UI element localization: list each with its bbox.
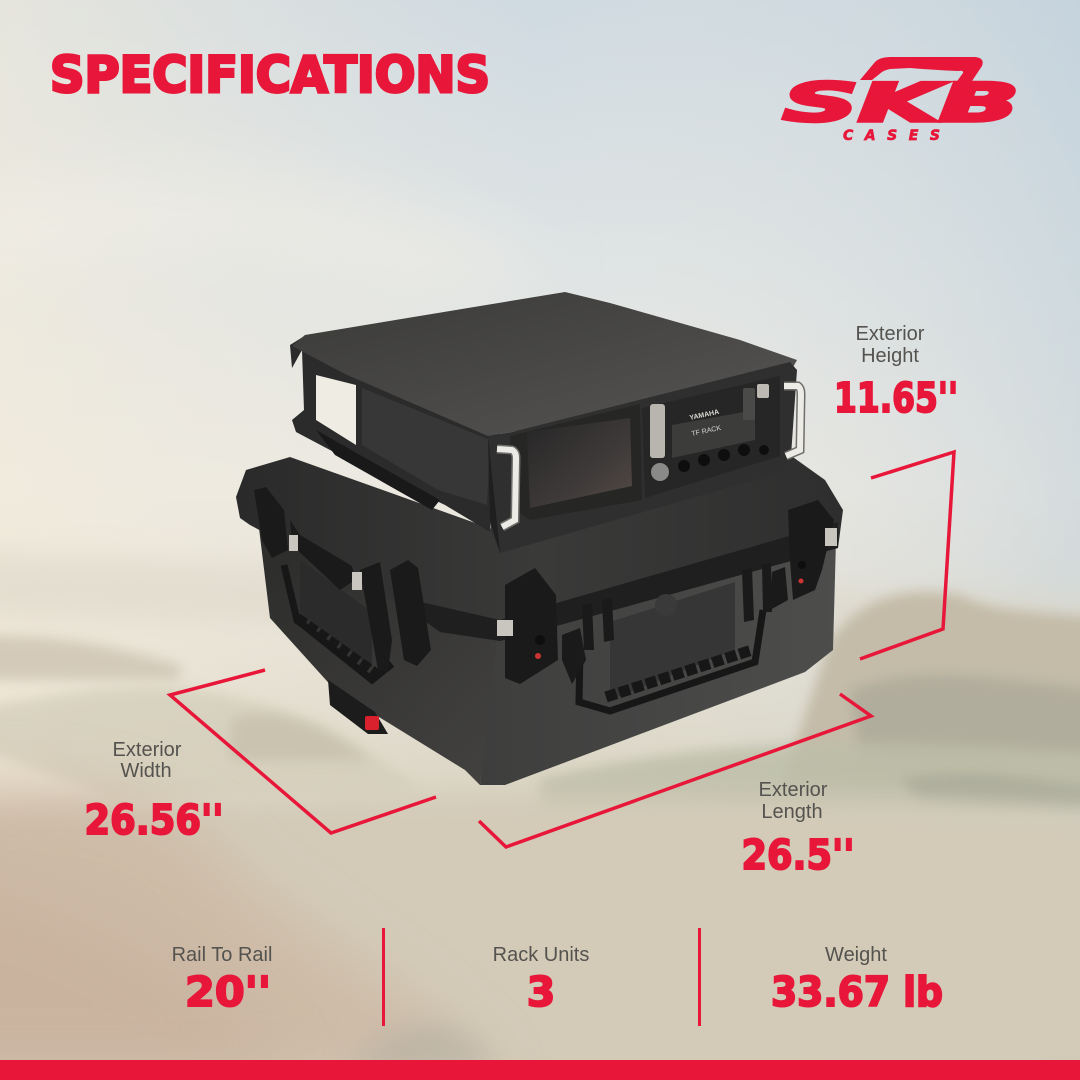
dimension line: exterior width (170, 670, 436, 833)
latch hardware and red wheel tab (289, 528, 837, 734)
logo: SKB Cases: CASES (843, 128, 940, 144)
logo: SKB Cases: SKB (783, 73, 1019, 134)
product: hard case with rack unit on top (236, 292, 843, 785)
spec: rail to rail (172, 944, 272, 1016)
bottom red bar (0, 1060, 1080, 1080)
spec: rail to rail: Rail To Rail (172, 944, 272, 966)
spec: exterior height: Exterior (856, 323, 925, 345)
spec: rack units (493, 944, 589, 1016)
spec: exterior length: Length (761, 801, 823, 823)
rack handles (497, 386, 801, 527)
spec: weight (771, 944, 943, 1016)
spec: rack units: Rack Units (493, 944, 589, 966)
hard case body (236, 455, 843, 785)
spec: exterior width (84, 739, 224, 844)
spec: weight: 33.67 lb (771, 968, 943, 1016)
logo: SKB Cases (783, 57, 1019, 144)
spec: exterior length (742, 779, 854, 879)
spec: exterior width: Exterior (113, 739, 182, 761)
front handle and latches (505, 500, 834, 711)
spec: exterior length: 26.5'' (742, 831, 854, 879)
rack unit: front panel (488, 362, 797, 553)
spec: exterior width: 26.56'' (84, 796, 224, 844)
side handle and latches (254, 487, 431, 680)
spec: exterior length: Exterior (759, 779, 828, 801)
spec: exterior width: Width (120, 760, 172, 782)
spec: exterior height: 11.65'' (834, 374, 958, 422)
dimension line: exterior length (479, 694, 871, 847)
rack unit: top face (292, 292, 797, 436)
title: SPECIFICATIONS (50, 46, 490, 104)
dimension line: exterior height (860, 452, 954, 659)
rack unit: open side frame (290, 335, 500, 532)
spec: rail to rail: 20'' (185, 968, 271, 1016)
rack unit: front panel: YAMAHA (689, 409, 720, 422)
spec: exterior height (834, 323, 958, 422)
spec: rack units: 3 (527, 968, 555, 1016)
spec: weight: Weight (825, 944, 887, 966)
spec: exterior height: Height (861, 345, 919, 367)
rack unit: front panel: TF RACK (691, 425, 722, 438)
